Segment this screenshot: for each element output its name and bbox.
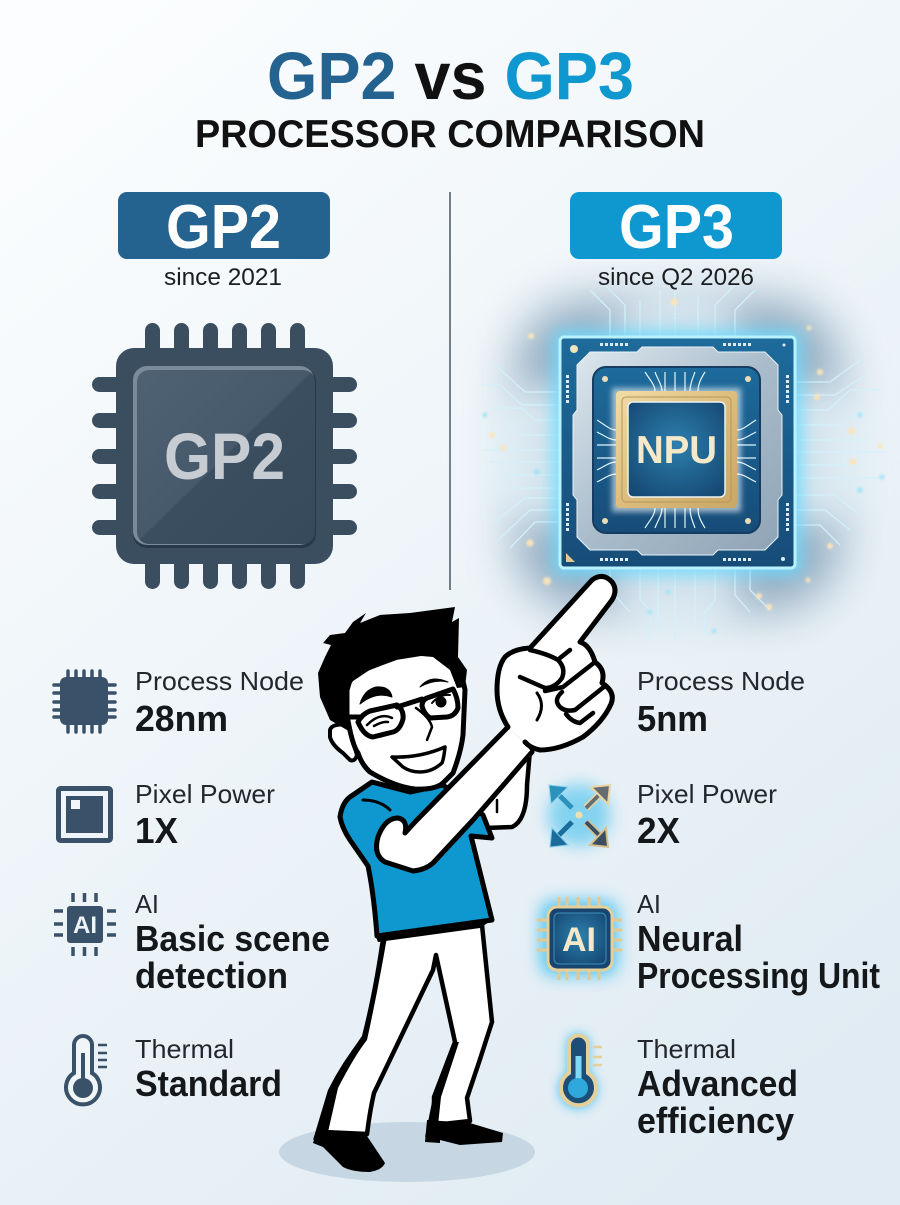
GP2 chip illustration [92, 323, 357, 589]
NPU label: NPU [636, 429, 717, 472]
process node text GP2: Process Node [135, 666, 304, 696]
character pointing at GP3 [279, 576, 615, 1182]
glow halo [515, 300, 840, 610]
thermal text GP3: Advanced [637, 1063, 798, 1104]
winking eye [367, 716, 392, 726]
pixel power text GP2 [135, 779, 275, 851]
sleeve crease [363, 800, 390, 810]
shirt [340, 782, 492, 936]
gold NPU frame [612, 388, 741, 512]
thermal text GP2: Thermal [135, 1034, 234, 1064]
dark blue die area [593, 367, 760, 533]
pixel power text GP2: Pixel Power [135, 779, 275, 809]
AI text GP2: detection [135, 955, 288, 996]
icon: GP3 AI chip: AI [562, 921, 596, 959]
thermal text GP2 [135, 1034, 282, 1104]
back arm [470, 750, 530, 828]
GP3 header [570, 192, 782, 291]
icon: GP2 AI chip [54, 893, 116, 956]
pointing arm [377, 727, 532, 871]
thermal text GP2: Standard [135, 1063, 282, 1104]
thermal text GP3 [637, 1034, 798, 1141]
pointing hand [497, 576, 615, 750]
pixel power text GP3: Pixel Power [637, 779, 777, 809]
process node text GP3: Process Node [637, 666, 805, 696]
light vertical mist [615, 290, 740, 640]
GP2 badge [118, 192, 330, 259]
GP2 chip illustration: GP2 [164, 419, 285, 493]
GP3 chip illustration with glow and circuit traces [480, 280, 885, 640]
icon: GP3 expanding arrows [548, 784, 610, 847]
face [347, 652, 465, 789]
GP2 header [118, 192, 330, 291]
pixel power text GP3: 2X [637, 810, 680, 851]
GP2 since date: since 2021 [164, 264, 282, 291]
title line: GP2 vs GP3: GP2 vs GP3 [267, 39, 634, 114]
icon: GP2 AI chip: AI [73, 912, 97, 939]
pixel power text GP3 [637, 779, 777, 851]
nose [416, 708, 432, 740]
open eye [436, 696, 446, 708]
icon: GP2 pixel [58, 788, 110, 840]
eyebrows [360, 679, 448, 704]
trousers [324, 925, 492, 1134]
pixel power text GP2: 1X [135, 810, 178, 851]
thumb [520, 650, 563, 688]
right specs column [537, 666, 880, 1141]
AI text GP3 [637, 889, 880, 996]
icon: GP2 process node chip [54, 671, 115, 732]
left specs column [54, 666, 330, 1104]
GP3 badge [570, 192, 782, 259]
process node text GP2 [135, 666, 304, 739]
chip substrate [560, 337, 795, 568]
circuit traces [482, 280, 885, 640]
AI text GP2: Basic scene [135, 918, 330, 959]
mouth [392, 747, 445, 772]
shirt hem [376, 920, 492, 942]
GP3 since date: since Q2 2026 [598, 264, 754, 291]
icon: GP3 thermometer [558, 1033, 602, 1109]
finger separators [545, 650, 605, 723]
AI text GP3: AI [637, 889, 661, 919]
AI text GP2 [135, 889, 330, 996]
thermal text GP3: efficiency [637, 1100, 794, 1141]
subtitle: processor comparison: PROCESSOR COMPARISON [195, 113, 705, 156]
NPU core [628, 402, 725, 497]
light horizontal mist [480, 385, 875, 525]
GP3 badge label: GP3 [619, 193, 734, 262]
center divider [449, 192, 451, 590]
process node text GP3 [637, 666, 805, 739]
AI text GP3: Neural [637, 918, 743, 959]
particles [482, 298, 884, 634]
right shoe [425, 1120, 503, 1145]
process node text GP3: 5nm [637, 698, 708, 739]
glasses [347, 689, 458, 737]
floor shadow [279, 1122, 535, 1182]
eyelid [432, 695, 450, 703]
title [195, 39, 705, 156]
silver heat spreader [573, 347, 782, 555]
GP2 badge label: GP2 [166, 193, 281, 262]
palm crease [537, 693, 542, 720]
icon: GP3 AI chip [537, 897, 622, 980]
ear [330, 725, 357, 760]
die bond wires [597, 372, 756, 528]
AI text GP2: AI [135, 889, 159, 919]
left shoe [313, 1130, 385, 1172]
substrate contact dots [568, 344, 788, 561]
hair [318, 607, 467, 733]
process node text GP2: 28nm [135, 698, 228, 739]
icon: GP2 thermometer [66, 1036, 107, 1104]
chip cyan glow [553, 330, 802, 575]
thermal text GP3: Thermal [637, 1034, 736, 1064]
